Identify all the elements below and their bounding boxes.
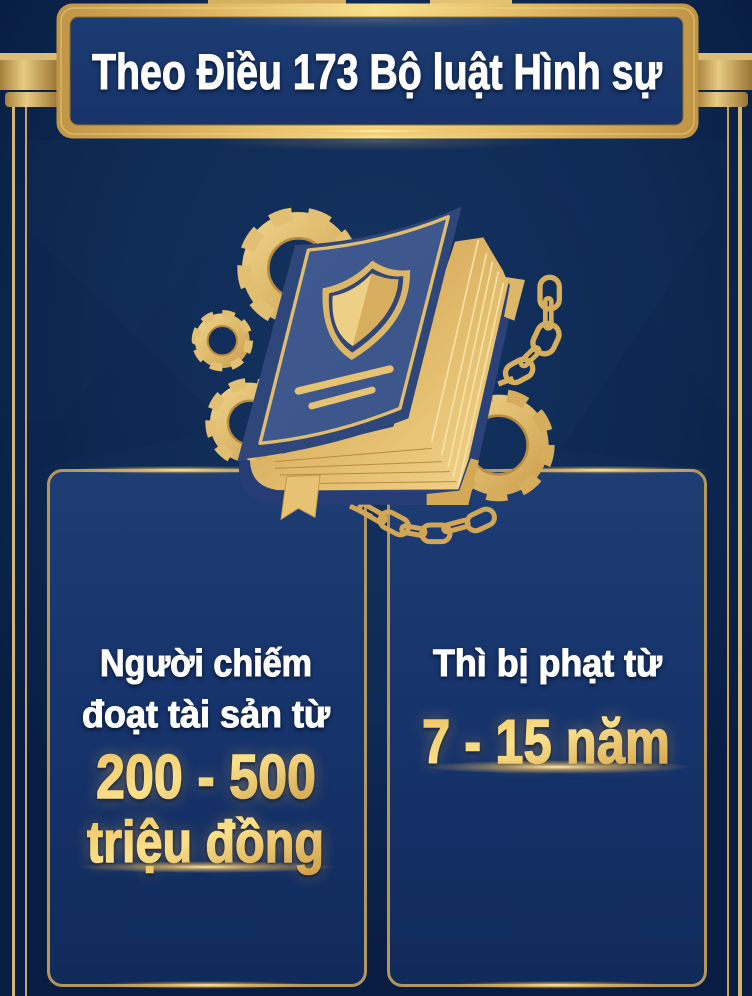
amount figure: 200 - 500 xyxy=(96,743,316,812)
right card label: Thì bị phạt từ xyxy=(433,643,662,685)
icon: cover title bars xyxy=(298,369,390,406)
icon: bookmark xyxy=(281,475,320,519)
icon: cover panel xyxy=(260,217,448,443)
panel: left card xyxy=(48,466,366,989)
panel: right card xyxy=(388,466,710,989)
left card label: Người chiếm xyxy=(100,643,312,685)
top ornaments xyxy=(208,0,512,4)
left card second line: đoạt tài sản từ xyxy=(82,694,330,736)
icon: book cover xyxy=(237,207,462,462)
penalty figure: 7 - 15 năm xyxy=(422,708,670,777)
icon: spine base xyxy=(239,457,428,504)
icon: gear top left xyxy=(244,214,352,322)
icon: gear right xyxy=(448,395,548,495)
amount unit: triệu đồng xyxy=(87,810,324,875)
title banner xyxy=(56,4,698,151)
icon: gold corner top xyxy=(503,277,525,321)
icon: shield xyxy=(322,261,410,360)
icon: small gear xyxy=(196,314,249,367)
left column xyxy=(0,53,59,996)
icon: right chain xyxy=(498,277,562,386)
icon: gear lower left xyxy=(211,383,289,462)
amount glow xyxy=(77,861,337,873)
penalty glow xyxy=(422,760,692,774)
icon: back cover xyxy=(280,280,516,505)
right column xyxy=(696,53,752,996)
icon: pages xyxy=(250,237,508,491)
icon: gold corner bottom xyxy=(427,458,479,505)
icon: bottom chain xyxy=(350,503,497,542)
icon: law book with gears and chains xyxy=(196,207,562,542)
